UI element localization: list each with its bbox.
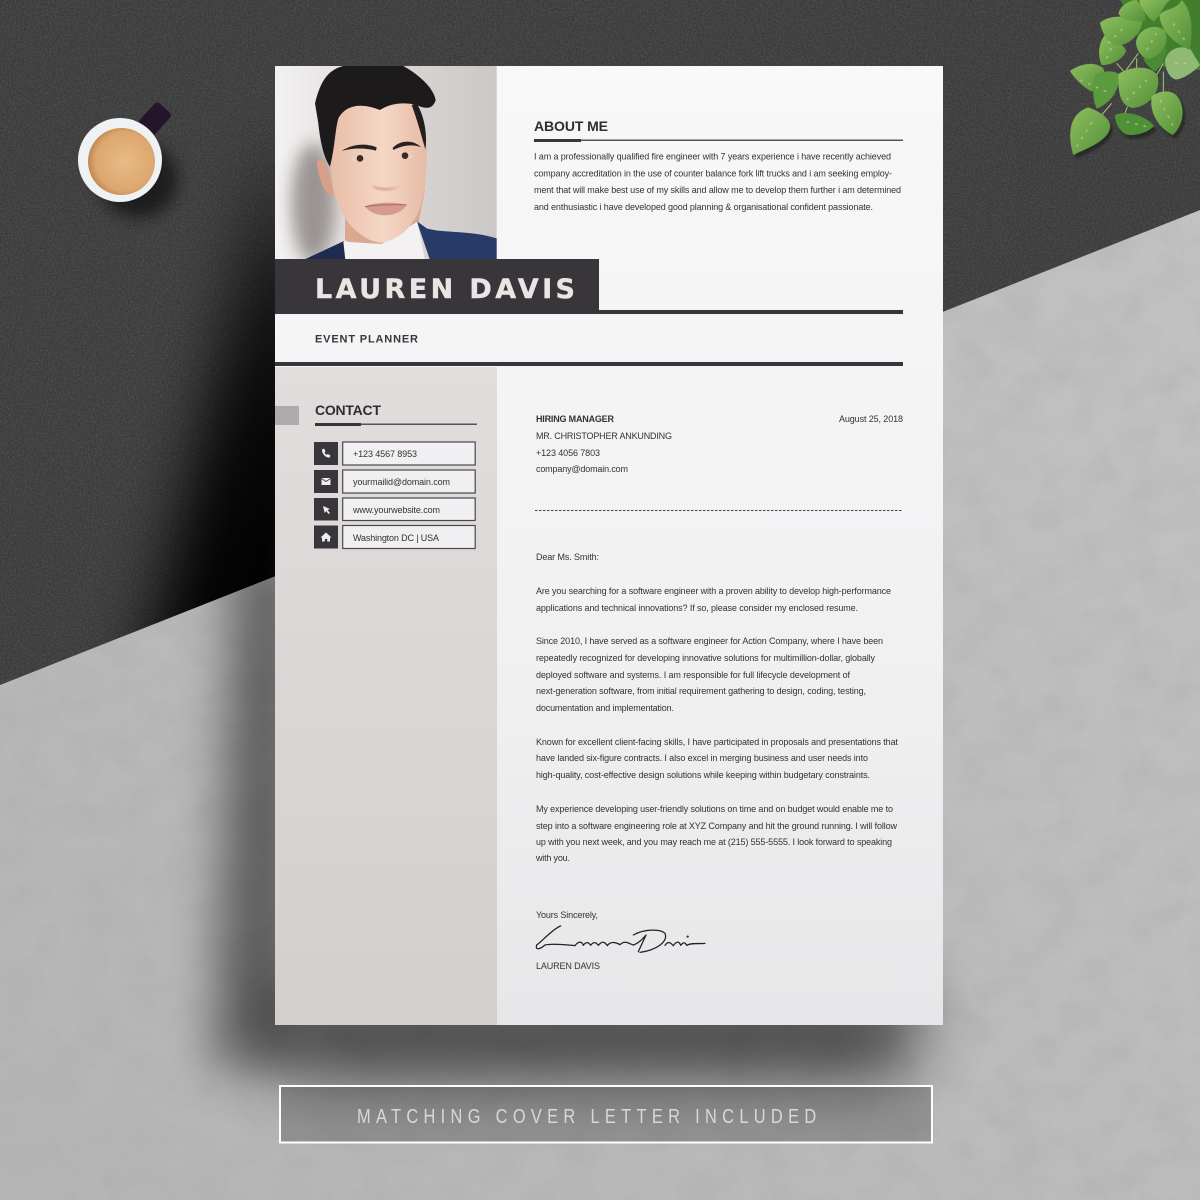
letter body: repeatedly recognized for developing innovative solutions for multimillion-dollar, globally — [536, 653, 876, 663]
recipient block: MR. CHRISTOPHER ANKUNDING — [536, 431, 672, 441]
signer name: LAUREN DAVIS — [536, 961, 600, 971]
contact: address — [314, 526, 475, 548]
contact: website — [314, 498, 475, 520]
about me section: company accreditation in the use of counter balance fork lift trucks and i am seeking employ- — [534, 168, 892, 178]
contact: address: Washington DC | USA — [353, 533, 439, 543]
recipient block: company@domain.com — [536, 464, 628, 474]
letter body: My experience developing user-friendly solutions on time and on budget would enable me to — [536, 804, 893, 814]
contact: email: yourmailid@domain.com — [353, 477, 450, 487]
sidebar panel — [275, 367, 497, 1025]
name banner: LAUREN DAVIS — [315, 274, 575, 305]
letter body: with you. — [535, 853, 570, 863]
recipient block — [536, 414, 672, 474]
dashed divider — [535, 510, 903, 512]
resume paper — [275, 66, 943, 1025]
contact heading: CONTACT — [315, 402, 381, 418]
letter body: documentation and implementation. — [536, 703, 674, 713]
recipient block: HIRING MANAGER — [536, 414, 614, 424]
about me section: ABOUT ME — [534, 118, 608, 134]
about me section: I am a professionally qualified fire engineer with 7 years experience i have recently achieved — [534, 152, 891, 162]
signature — [536, 926, 705, 952]
caption banner — [280, 1086, 932, 1142]
contact heading — [275, 402, 477, 426]
plant leaves — [1070, 0, 1200, 159]
letter body: have landed six-figure contracts. I also excel in merging business and user needs into — [536, 753, 868, 763]
letter body: deployed software and systems. I am responsible for full lifecycle development of — [536, 670, 850, 680]
letter body: next-generation software, from initial requirement gathering to design, coding, testing, — [536, 686, 866, 696]
letter body: step into a software engineering role at XYZ Company and hit the ground running. I will follow — [536, 821, 898, 831]
portrait photo — [275, 66, 497, 263]
contact: website: www.yourwebsite.com — [352, 505, 440, 515]
title rule — [275, 362, 903, 366]
coffee cup — [78, 101, 178, 218]
date: August 25, 2018 — [839, 414, 903, 424]
letter body: Since 2010, I have served as a software engineer for Action Company, where I have been — [536, 636, 883, 646]
sign-off: Yours Sincerely, — [536, 910, 598, 920]
recipient block: +123 4056 7803 — [536, 448, 600, 458]
about me section — [534, 118, 903, 212]
name rule — [599, 310, 903, 314]
job title: EVENT PLANNER — [315, 334, 418, 346]
name banner — [275, 259, 599, 314]
contact: phone: +123 4567 8953 — [353, 449, 417, 459]
letter body — [535, 552, 898, 863]
caption banner: MATCHING COVER LETTER INCLUDED — [357, 1104, 816, 1127]
letter body: applications and technical innovations? If so, please consider my enclosed resume. — [536, 603, 858, 613]
letter body: Dear Ms. Smith: — [536, 552, 599, 562]
contact: phone — [314, 442, 475, 465]
letter body: high-quality, cost-effective design solutions while keeping within budgetary constraints. — [536, 770, 870, 780]
contact: email — [314, 470, 475, 493]
about me section: ment that will make best use of my skills and allow me to develop them further i am determined — [534, 185, 901, 195]
about me section: and enthusiastic i have developed good planning & organisational confident passionate. — [534, 202, 873, 212]
letter body: up with you next week, and you may reach me at (215) 555-5555. I look forward to speaking — [536, 837, 892, 847]
letter body: Are you searching for a software engineer with a proven ability to develop high-performance — [536, 586, 891, 596]
letter body: Known for excellent client-facing skills, I have participated in proposals and presentations that — [536, 737, 898, 747]
